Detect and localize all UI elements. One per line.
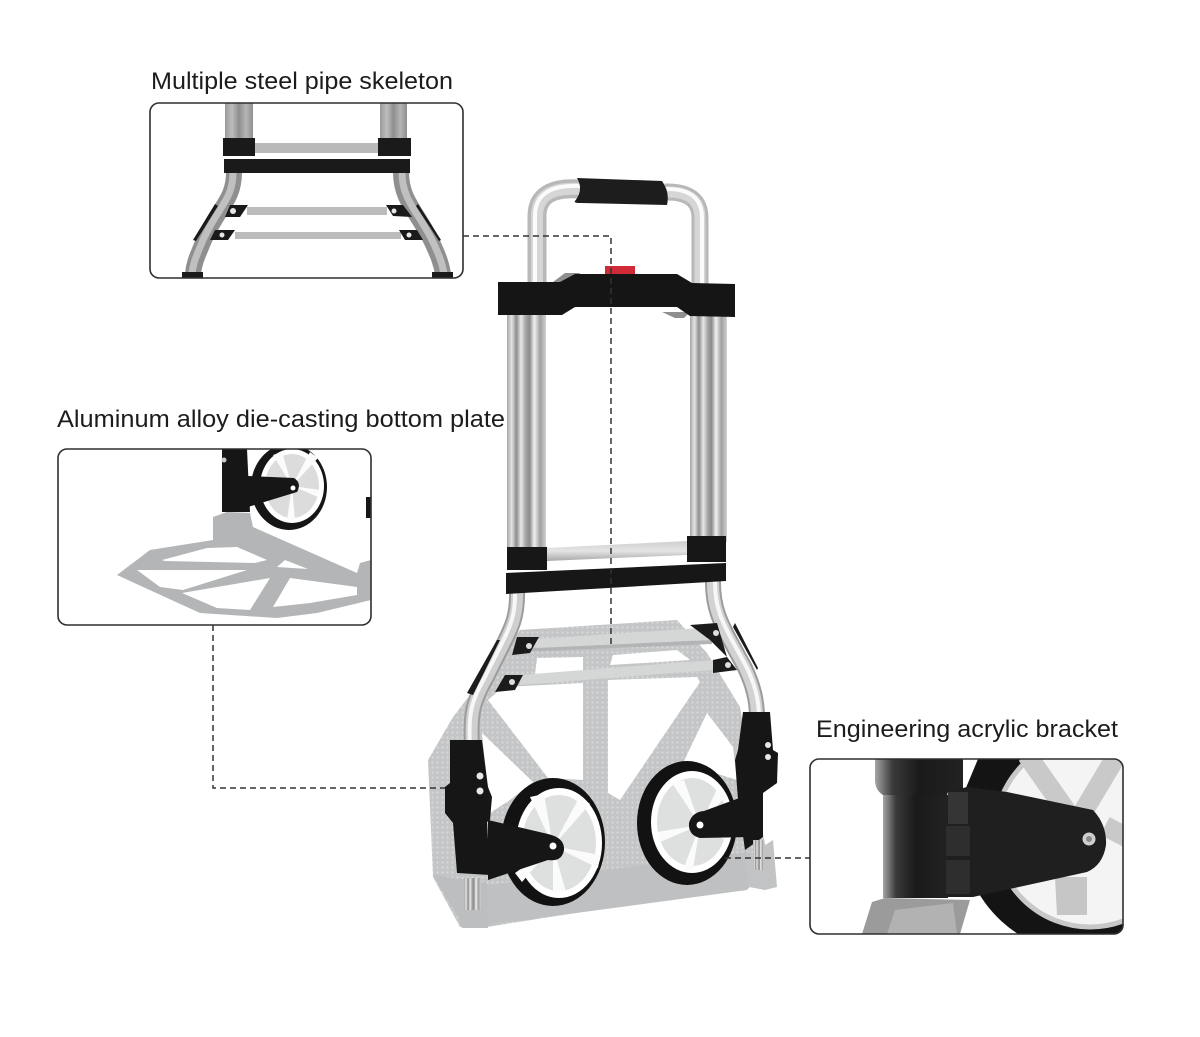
middle gray cross bar xyxy=(547,541,687,561)
infographic canvas xyxy=(57,72,1124,935)
aluminum bottom plate xyxy=(428,620,777,928)
dashed leader line: acrylic bracket xyxy=(725,857,810,859)
black cylinder upper xyxy=(875,759,963,795)
inset panel: engineering acrylic bracket xyxy=(809,758,1124,935)
pipe legs xyxy=(192,172,444,274)
left wheel arm xyxy=(488,820,564,880)
inset panel: aluminum alloy bottom plate xyxy=(58,444,371,625)
lower telescopic rails xyxy=(520,628,713,685)
right wheel arm xyxy=(689,793,753,838)
bracket bolts xyxy=(220,208,412,238)
telescopic upper tubes xyxy=(507,312,727,552)
pipe cross rails xyxy=(235,207,401,239)
black bracket arm xyxy=(946,787,1106,897)
black rail brackets xyxy=(467,623,758,695)
main product: folding hand trolley xyxy=(428,178,778,928)
label: aluminum alloy bottom plate: Aluminum alloy die-casting bottom plate xyxy=(57,406,505,433)
black cylinder lower xyxy=(883,795,948,898)
gray base casting xyxy=(862,898,970,934)
black top cross bar xyxy=(498,273,735,318)
red release button xyxy=(605,266,635,275)
large wheel xyxy=(966,760,1122,934)
pipe tubes upper xyxy=(225,103,407,153)
hinge bolts xyxy=(476,742,771,794)
handle tubes and grip xyxy=(535,178,702,285)
label: engineering acrylic bracket: Engineering acrylic bracket xyxy=(816,716,1118,743)
black clamps and brackets xyxy=(182,138,453,278)
right black hinge column xyxy=(735,712,778,850)
dashed leader line: bottom plate xyxy=(213,625,445,788)
black clamps and lower strap xyxy=(506,536,726,594)
dashed leader line: pipe skeleton xyxy=(463,236,611,645)
label: multiple steel pipe skeleton: Multiple steel pipe skeleton xyxy=(151,68,453,95)
left wheel xyxy=(501,778,605,906)
inset panel: multiple steel pipe skeleton xyxy=(150,103,463,278)
small wheel xyxy=(251,444,327,530)
curved lower frame tubes xyxy=(470,578,759,745)
black column and arm xyxy=(222,449,371,518)
die-cast plate xyxy=(117,512,371,618)
right wheel xyxy=(637,761,737,885)
chrome axle pins and feet xyxy=(464,840,764,910)
left black hinge column xyxy=(445,740,492,875)
